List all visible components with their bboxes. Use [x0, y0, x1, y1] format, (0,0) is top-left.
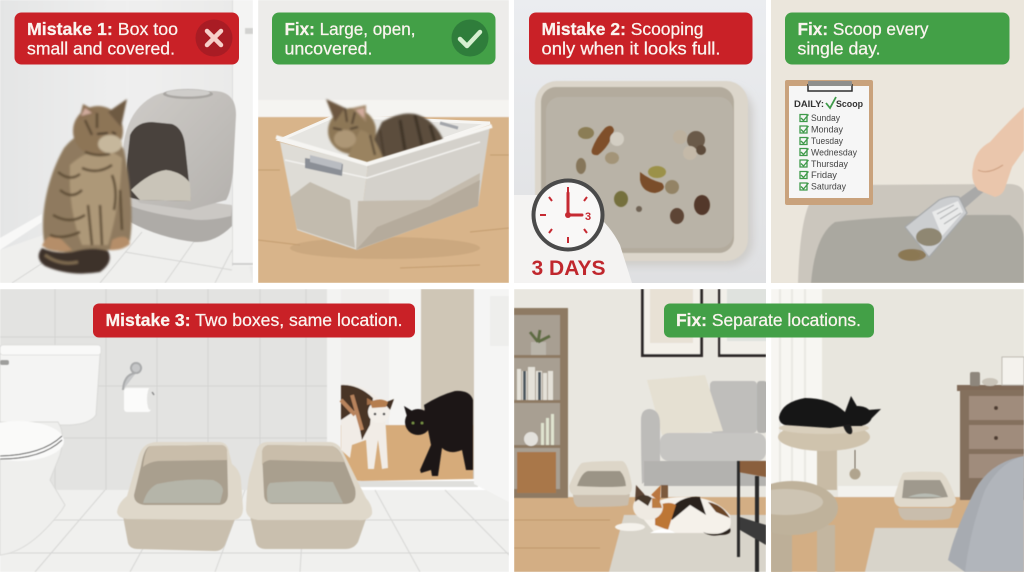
panel: fix 1 large open box — [258, 0, 509, 283]
clear storage tub front with litter — [276, 123, 492, 250]
mistake 1 label: Mistake 1: Box too — [27, 19, 178, 39]
sofa with cushion — [641, 375, 767, 498]
fix 2 label — [785, 12, 1010, 64]
panel: mistake 2 dirty litter — [514, 0, 766, 283]
clipboard checklist: DAILY: — [794, 99, 824, 110]
dresser with decor — [957, 357, 1024, 500]
scene: corner wall and tile floor — [0, 0, 253, 283]
icon: x mark — [196, 20, 232, 56]
clipboard checklist: Tuesday — [811, 136, 843, 146]
left litter box — [117, 442, 243, 551]
clipboard checklist — [785, 80, 873, 205]
fix 2 label: single day. — [798, 38, 880, 58]
clipboard checklist: Thursday — [811, 159, 848, 169]
white corner tab — [514, 195, 632, 283]
clipboard checklist: Wednesday — [811, 148, 857, 158]
3 days caption: 3 DAYS — [532, 257, 606, 280]
panel: fix 2 scoop daily — [771, 0, 1024, 283]
toilet paper roll — [123, 363, 154, 412]
litter tray with scoop area — [798, 184, 1024, 283]
scene: wall — [771, 0, 1024, 283]
fix 3 label: Fix: Separate locations. — [676, 310, 861, 330]
coffee table — [737, 461, 766, 572]
panel: fix 3 bedroom — [746, 289, 1024, 572]
hand holding scoop — [972, 107, 1024, 197]
mistake 1 label — [14, 12, 239, 64]
metal scoop with clump — [905, 186, 983, 256]
mistake 2 label — [529, 12, 752, 64]
scene: living room wall and floor — [514, 289, 766, 572]
litter box by shelf — [569, 461, 632, 507]
wooden bookshelf — [514, 308, 568, 498]
covered grey litter box — [123, 89, 236, 242]
cat tree — [746, 422, 870, 572]
fix 3 label — [664, 304, 874, 338]
white toilet — [0, 345, 101, 555]
litter box by dresser — [894, 472, 956, 520]
mistake 2 label: only when it looks full. — [542, 38, 720, 58]
mistake 2 label: Mistake 2: Scooping — [542, 19, 704, 39]
framed wall art — [641, 289, 767, 357]
bed with grey blanket — [948, 456, 1024, 572]
clock icon showing three days: 3 — [585, 211, 591, 223]
clipboard checklist: Saturday — [811, 182, 846, 192]
clipboard checklist: Scoop — [836, 99, 863, 110]
tub interior back wall and rim — [276, 116, 490, 157]
right litter box — [246, 442, 372, 549]
clipboard checklist: Monday — [811, 124, 843, 134]
icon: check mark — [452, 20, 488, 56]
black cat in doorway — [404, 391, 473, 476]
calico cat in doorway — [341, 384, 394, 469]
waste clumps — [576, 126, 710, 224]
fix 1 label: uncovered. — [284, 38, 372, 58]
panel: mistake 1 covered box — [0, 0, 253, 283]
scene: bedroom wall, floor and curtain — [771, 289, 1024, 572]
panel: mistake 3 two boxes same location — [0, 289, 509, 572]
scene: background — [514, 0, 766, 283]
calico cat lying on rug — [615, 485, 731, 536]
mistake 3 label: Mistake 3: Two boxes, same location. — [106, 310, 402, 330]
clock icon showing three days — [532, 178, 604, 252]
tabby cat inside tub — [326, 99, 444, 168]
fix 1 label: Fix: Large, open, — [284, 19, 416, 39]
checkbox column — [800, 114, 808, 190]
scene: wall and wood floor — [258, 0, 509, 283]
mistake 3 label — [93, 304, 415, 338]
black cat sleeping on tree — [779, 396, 881, 434]
clipboard checklist: Sunday — [811, 113, 840, 123]
fix 1 label — [272, 12, 496, 64]
panel: fix 3 living room — [514, 289, 767, 572]
clipboard checklist: Friday — [811, 170, 838, 180]
fix 2 label: Fix: Scoop every — [798, 19, 929, 39]
mistake 1 label: small and covered. — [27, 38, 175, 58]
overfull litter tray from above — [535, 81, 753, 266]
scene: bathroom tile wall, floor, doorway — [0, 289, 509, 572]
tabby cat sitting — [39, 99, 132, 274]
